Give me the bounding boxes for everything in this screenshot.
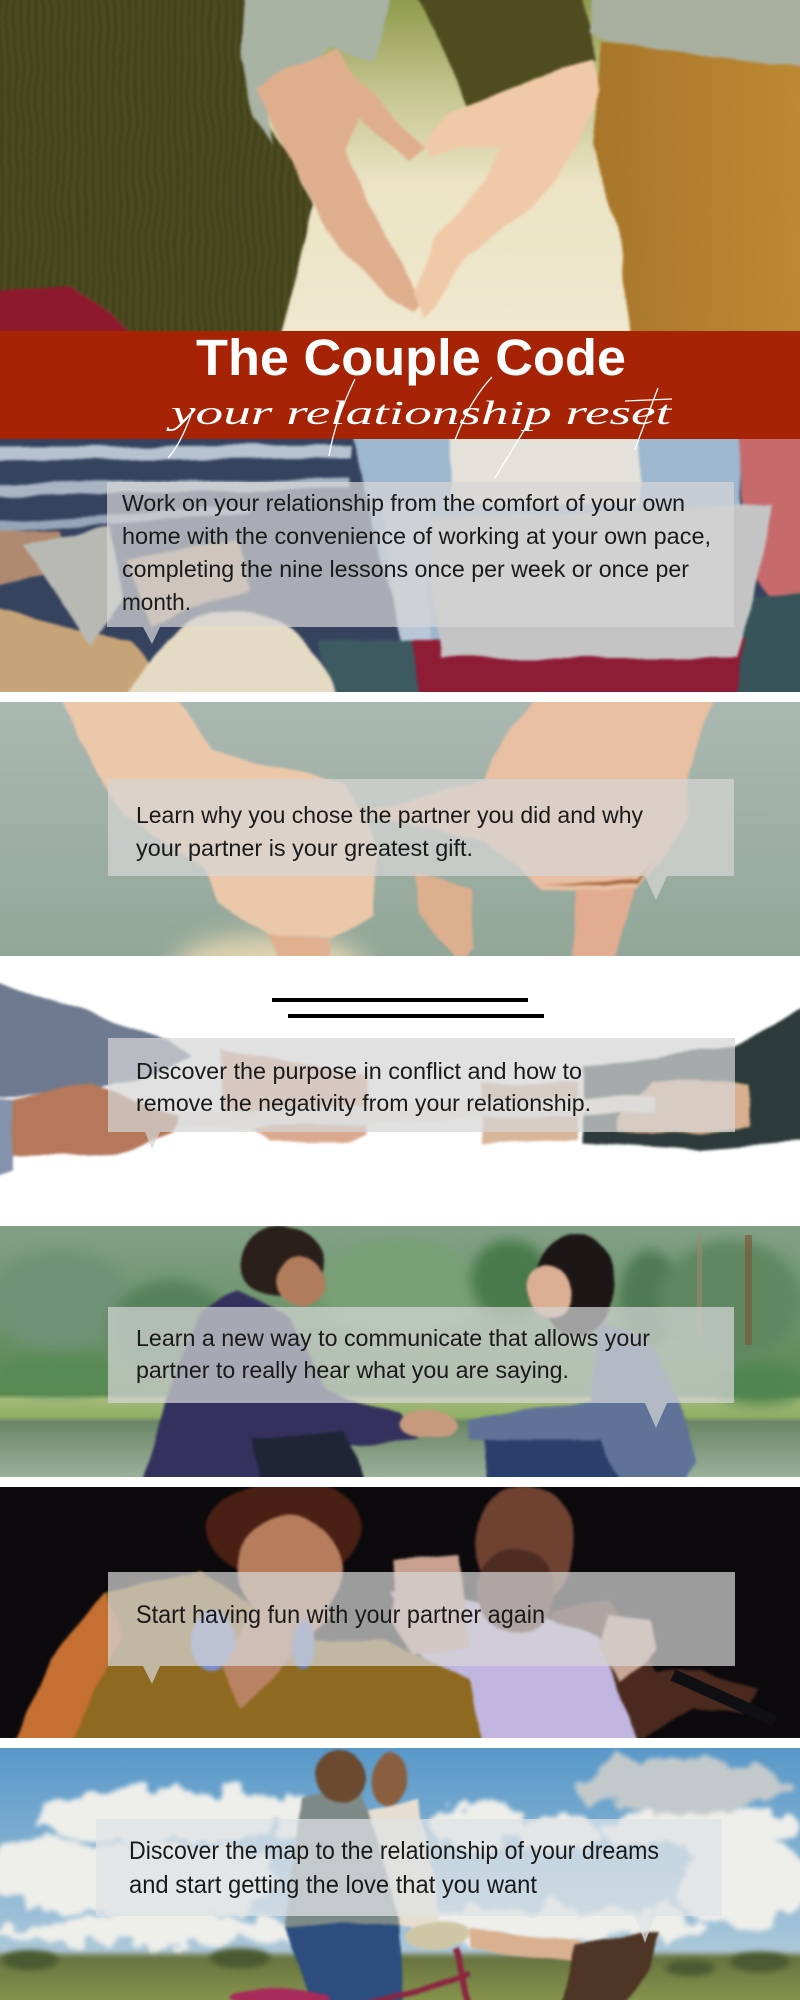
callout: why you chose your partner	[108, 779, 734, 900]
callout: work at your own pace: completing the nine lessons once per week or once per	[122, 556, 689, 582]
photo: couple by a lake	[0, 1226, 800, 1485]
callout: a new way to communicate: partner to really hear what you are saying.	[136, 1357, 569, 1383]
title band	[0, 329, 800, 439]
photo: hooked little fingers	[0, 702, 800, 956]
callout: a new way to communicate: Learn a new way to communicate that allows your	[136, 1325, 650, 1351]
callout: why you chose your partner: Learn why you chose the partner you did and why	[136, 802, 643, 828]
callout: work at your own pace: home with the convenience of working at your own pace,	[122, 523, 711, 549]
panel: tug of war hands on white	[0, 982, 800, 1177]
callout: work at your own pace: Work on your relationship from the comfort of your own	[122, 490, 685, 516]
callout: purpose in conflict: remove the negativity from your relationship.	[136, 1090, 591, 1116]
subtitle script	[166, 377, 674, 478]
callout: map to the relationship of your dreams: Discover the map to the relationship of your dreams	[129, 1837, 659, 1865]
callout: map to the relationship of your dreams: and start getting the love that you want	[129, 1871, 537, 1899]
photo: couple on sofa with laptop and tablet	[0, 430, 800, 700]
callout: start having fun	[108, 1572, 735, 1684]
callout: purpose in conflict: Discover the purpose in conflict and how to	[136, 1058, 582, 1084]
photo: heart-shaped hands	[0, 0, 800, 345]
decorative double rule	[272, 998, 544, 1018]
title text: The Couple Code	[196, 329, 626, 386]
callout: work at your own pace: month.	[122, 589, 191, 615]
callout: why you chose your partner: your partner is your greatest gift.	[136, 835, 473, 861]
photo: couple having fun on black	[0, 1480, 800, 1745]
photo: couple kissing on bicycle under a cloudy sky	[0, 1748, 800, 2000]
callout: purpose in conflict	[108, 1038, 735, 1149]
callout: start having fun: Start having fun with your partner again	[136, 1601, 545, 1629]
callout: a new way to communicate	[108, 1307, 734, 1428]
callout: work at your own pace	[107, 482, 734, 644]
subtitle script: your relationship reset	[166, 395, 674, 432]
callout: map to the relationship of your dreams	[96, 1819, 722, 1943]
